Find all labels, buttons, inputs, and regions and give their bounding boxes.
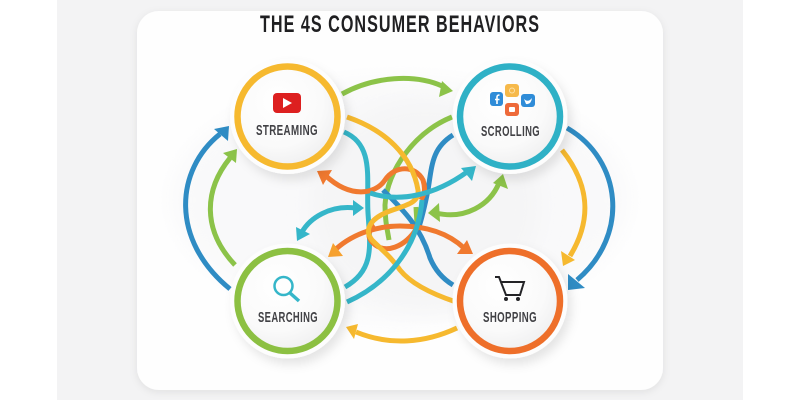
arrow: yellow streaming to shopping	[347, 117, 456, 302]
icon: video play	[273, 93, 301, 113]
arrow: teal double left	[296, 200, 364, 241]
arrow: streaming to scrolling	[342, 78, 453, 97]
arrow: green scrolling curve	[385, 117, 452, 240]
arrow: green double	[428, 174, 508, 222]
arrow: blue scrolling curve	[418, 135, 453, 230]
arrows: flows between behaviors	[186, 78, 613, 341]
title: THE 4S CONSUMER BEHAVIORS	[260, 11, 540, 38]
arrow: scrolling to shopping, yellow	[561, 150, 585, 266]
node: scrolling	[452, 59, 568, 174]
arrow: teal searching to scrolling	[347, 200, 422, 302]
arrow: teal streaming to searching	[344, 132, 370, 287]
arrow: blue to shopping	[383, 190, 453, 285]
label: scrolling: SCROLLING	[481, 123, 540, 140]
icon: social media tiles	[490, 84, 535, 116]
arrow: orange lower loop	[369, 226, 417, 249]
node: streaming	[230, 59, 345, 174]
arrow: double orange upper	[317, 169, 424, 200]
main card	[137, 11, 663, 390]
icon: shopping cart	[495, 277, 524, 301]
arrow: scrolling to shopping, blue	[567, 128, 613, 290]
node: shopping	[452, 244, 568, 358]
arrow: orange lower double	[328, 226, 473, 257]
node: searching	[230, 244, 345, 358]
arrow: searching to streaming, blue	[186, 126, 230, 289]
label: shopping: SHOPPING	[483, 309, 537, 326]
icon: magnifier	[274, 277, 299, 301]
arrow: teal double to scrolling	[370, 166, 476, 197]
label: searching: SEARCHING	[258, 309, 318, 326]
arrow: searching to streaming, green	[210, 149, 237, 265]
arrow: shopping to searching	[346, 324, 457, 341]
label: streaming: STREAMING	[256, 122, 318, 139]
